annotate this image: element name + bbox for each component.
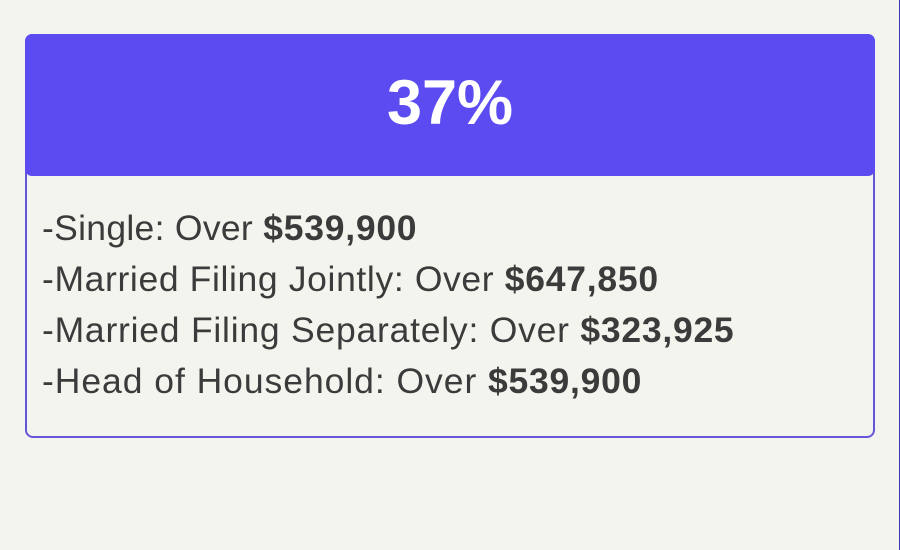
panel: tax bracket card <box>25 34 875 438</box>
text block: income thresholds <box>42 208 734 400</box>
threshold: married filing separately: -Married Filing Separately: Over $323,925 <box>42 310 734 350</box>
threshold: single: -Single: Over $539,900 <box>42 208 417 248</box>
threshold: married filing jointly: -Married Filing Jointly: Over $647,850 <box>42 258 659 298</box>
heading: 37% rate <box>25 34 875 176</box>
right edge line <box>899 0 900 550</box>
threshold: head of household: -Head of Household: Over $539,900 <box>42 360 642 400</box>
heading: 37% rate: 37% <box>387 68 513 138</box>
